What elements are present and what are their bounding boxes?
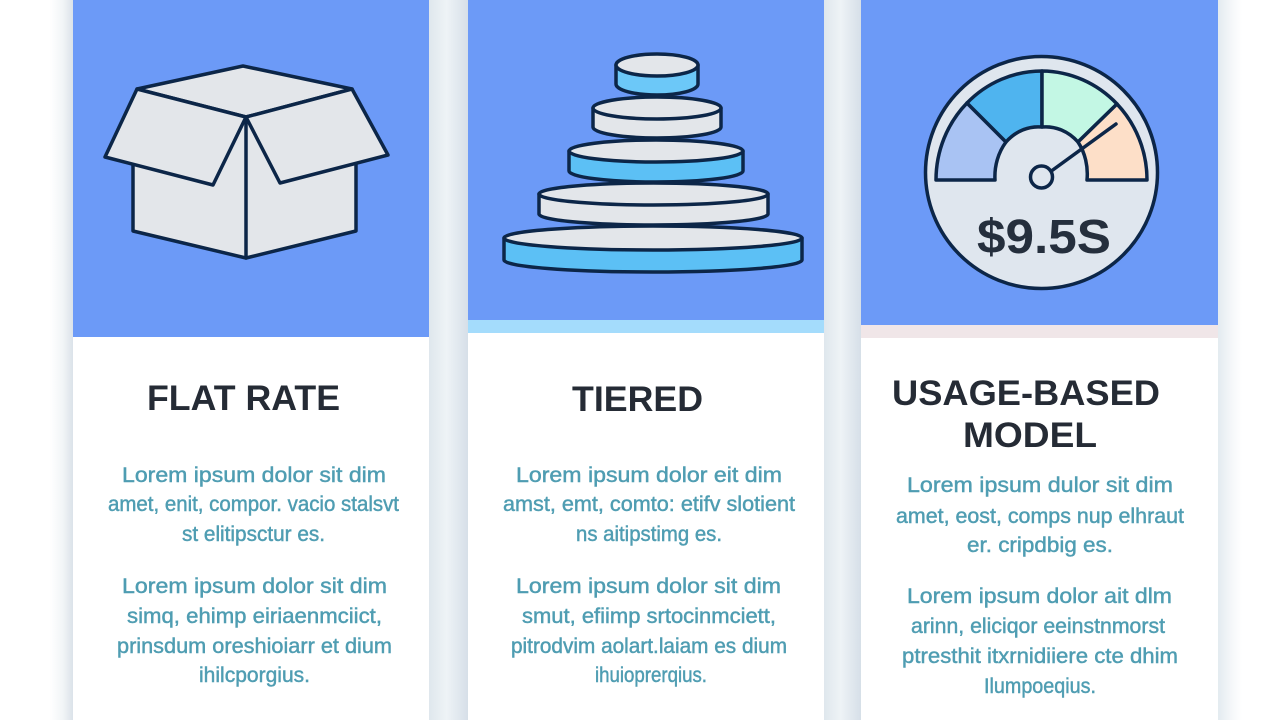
heading: usage-based model: MODEL	[963, 416, 1097, 455]
text block: flat rate second paragraph: prinsdum oreshioiarr et dium	[117, 635, 392, 658]
icon panel: tiered	[468, 0, 824, 320]
accent band: usage-based model	[861, 325, 1218, 338]
icon: stacked tiers	[504, 54, 802, 272]
heading: usage-based model: USAGE-BASED	[892, 374, 1160, 413]
text block: tiered second paragraph	[511, 575, 787, 687]
heading: flat rate: FLAT RATE	[147, 379, 340, 418]
text block: flat rate second paragraph: Lorem ipsum dolor sit dim	[122, 575, 387, 598]
gauge value: $9.5S	[977, 211, 1111, 264]
text block: usage-based first paragraph: Lorem ipsum dulor sit dim	[907, 474, 1173, 497]
text block: usage-based second paragraph	[902, 585, 1178, 698]
text block: usage-based first paragraph: er. cripdbig es.	[967, 534, 1113, 557]
text block: flat rate second paragraph: simq, ehimp eiriaenmciict,	[127, 605, 382, 628]
text block: flat rate second paragraph: ihilcporgius.	[199, 664, 310, 687]
heading: tiered: TIERED	[572, 380, 703, 419]
accent band: tiered	[468, 320, 824, 333]
text block: usage-based second paragraph: Lorem ipsum dolor ait dlm	[907, 585, 1172, 608]
text block: tiered first paragraph: ns aitipstimg es.	[576, 523, 722, 546]
icon panel: flat rate	[73, 0, 429, 337]
text block: flat rate first paragraph: amet, enit, compor. vacio stalsvt	[108, 493, 399, 516]
text block: tiered second paragraph: ihuioprerqius.	[595, 664, 707, 687]
panel: tiered	[468, 0, 824, 720]
text block: usage-based second paragraph: ptresthit itxrnidiiere cte dhim	[902, 645, 1178, 668]
panel: flat rate	[73, 0, 429, 720]
text block: tiered first paragraph: Lorem ipsum dolor eit dim	[516, 464, 782, 487]
panel: usage-based model	[861, 0, 1218, 720]
text block: usage-based first paragraph	[896, 474, 1184, 557]
text block: tiered first paragraph	[503, 464, 795, 546]
heading: usage-based model	[892, 374, 1160, 455]
text block: flat rate second paragraph	[117, 575, 392, 687]
text block: usage-based second paragraph: Ilumpoeqius.	[984, 675, 1096, 698]
icon panel: usage-based model	[861, 0, 1218, 325]
text block: usage-based first paragraph: amet, eost, comps nup elhraut	[896, 505, 1184, 528]
text block: tiered second paragraph: Lorem ipsum dolor sit dim	[516, 575, 781, 598]
text block: tiered first paragraph: amst, emt, comto: etifv slotient	[503, 493, 795, 516]
text block: tiered second paragraph: smut, efiimp srtocinmciett,	[522, 605, 776, 628]
icon: usage gauge	[926, 56, 1158, 288]
text block: flat rate first paragraph: Lorem ipsum dolor sit dim	[122, 464, 386, 487]
icon: open box	[105, 66, 388, 258]
text block: flat rate first paragraph: st elitipsctur es.	[182, 523, 325, 546]
text block: usage-based second paragraph: arinn, eliciqor eeinstnmorst	[911, 615, 1165, 638]
text block: flat rate first paragraph	[108, 464, 399, 546]
text block: tiered second paragraph: pitrodvim aolart.laiam es dium	[511, 635, 787, 658]
